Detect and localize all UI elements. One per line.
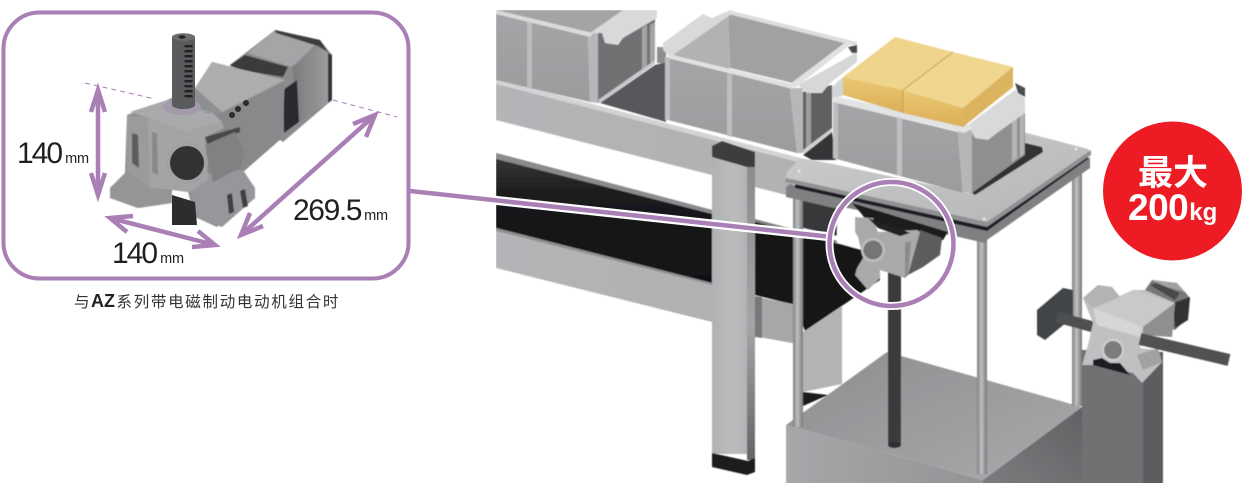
label: depth 269.5 mm: 269.5mm — [293, 194, 388, 227]
right side dark end plate — [1037, 288, 1073, 340]
motor body — [230, 30, 332, 142]
caption: 与 — [74, 293, 91, 311]
depth arrow — [241, 115, 375, 235]
solid right body fill — [205, 82, 285, 186]
solid foot fill — [188, 170, 255, 227]
red load badge — [1103, 122, 1242, 260]
caption: AZ — [91, 291, 115, 311]
height arrow — [91, 90, 105, 195]
right side screw rear section — [1057, 317, 1097, 328]
gearhead housing — [110, 62, 285, 227]
storage bin 3 — [832, 77, 1025, 193]
lower side beam — [496, 228, 803, 345]
right side screw front section — [1140, 339, 1229, 360]
right side actuator and motor — [1082, 280, 1190, 383]
badge text: maximum: 最大 — [1138, 154, 1208, 193]
front leg — [712, 141, 755, 475]
dashed extension lines — [85, 83, 397, 117]
magnifier circle — [830, 182, 954, 306]
width arrow — [110, 216, 215, 247]
label: width 140 mm: 140 mm — [112, 237, 184, 270]
white background inside magnifier — [837, 206, 862, 250]
lift base box — [786, 352, 1082, 484]
right side actuator support column — [1082, 350, 1163, 484]
lower black conveyor belt — [496, 153, 880, 331]
output flange hub — [163, 99, 201, 115]
housing bolt holes — [229, 100, 249, 118]
guide posts — [793, 170, 1082, 474]
lower support plate — [786, 153, 1090, 243]
upper conveyor belt surface — [600, 47, 836, 160]
dark frame block behind left post — [802, 200, 838, 236]
dimension panel — [4, 12, 408, 278]
upper side beam — [496, 79, 800, 196]
upper screw shaft — [172, 33, 195, 109]
lifting table plate — [785, 132, 1091, 227]
conveyor and lift scene — [496, 10, 1229, 484]
label: height 140 mm: 140 mm — [17, 137, 89, 170]
storage bin 2 — [663, 10, 857, 154]
black shaft cap — [166, 142, 208, 184]
actuator inside magnifier — [852, 203, 948, 290]
magnifier connector line — [410, 191, 832, 237]
vertical ball screw — [888, 270, 901, 448]
lower screw shaft — [172, 195, 197, 225]
yellow goods boxes — [843, 37, 1013, 127]
badge text: 200kg: 200kg — [1128, 187, 1217, 228]
rear leg — [803, 306, 842, 406]
caption: 系列带电磁制动电动机组合时 — [116, 293, 340, 311]
storage bin 1 — [496, 10, 657, 103]
